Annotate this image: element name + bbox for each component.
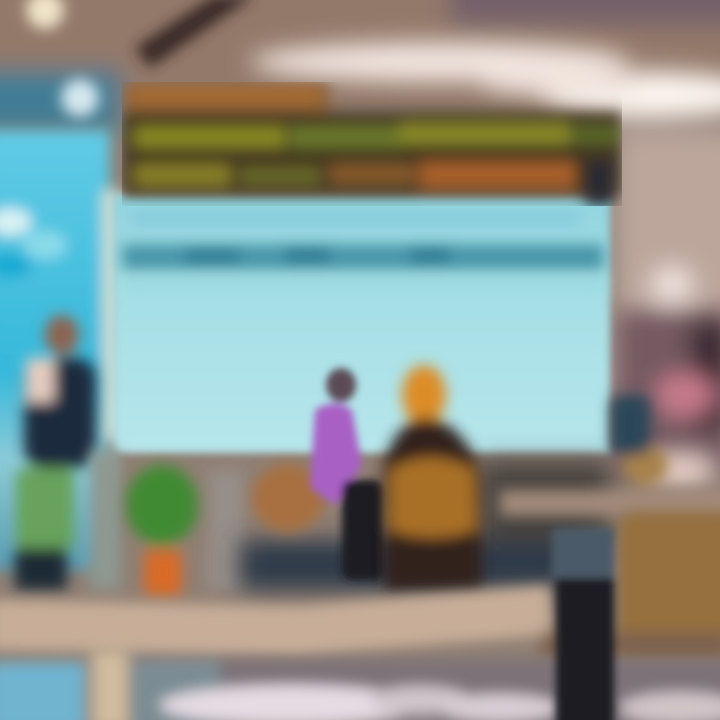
grey column <box>90 450 244 590</box>
person with orange head <box>382 365 482 590</box>
bottom strip <box>0 650 720 720</box>
potted plant <box>126 465 198 596</box>
lower background shadow <box>240 460 610 590</box>
teal text strip on screen <box>122 212 605 290</box>
black post <box>552 528 614 720</box>
left cyan screen <box>0 130 122 570</box>
main light screen <box>114 195 610 453</box>
ceiling background <box>0 0 720 460</box>
foreground table <box>500 490 720 516</box>
right wall people background <box>615 265 720 486</box>
ceiling dark beam <box>135 0 255 68</box>
person in purple <box>310 368 384 580</box>
left standing person <box>15 315 96 590</box>
white ceiling cloud <box>250 42 720 119</box>
beige floor <box>0 585 720 658</box>
heading band on screen <box>122 82 622 206</box>
foreground orange chair <box>610 395 720 652</box>
ceiling lights <box>26 0 99 117</box>
brown chair <box>252 464 324 532</box>
